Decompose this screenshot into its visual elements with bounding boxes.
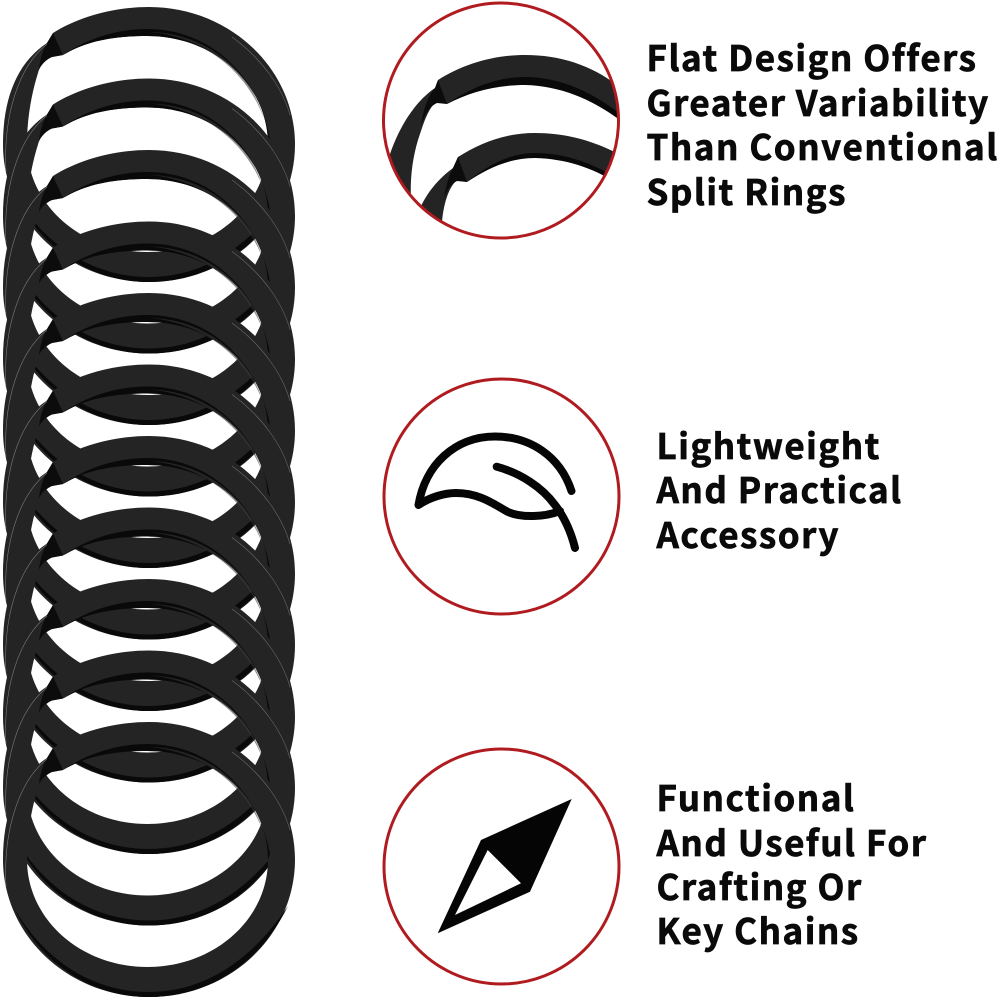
heading: flat design bbox=[646, 31, 998, 216]
callout: compass icon bbox=[384, 749, 619, 984]
ring 1 bbox=[3, 7, 295, 282]
ring 10 bbox=[3, 650, 295, 926]
heading: functional: Crafting Or bbox=[656, 860, 863, 911]
heading: functional: Functional bbox=[656, 771, 855, 822]
icon: compass needle bbox=[438, 799, 572, 933]
heading: flat design: Flat Design Offers bbox=[646, 31, 977, 82]
red circle frame bbox=[384, 749, 619, 984]
ring 7 bbox=[3, 436, 295, 711]
heading: flat design: Than Conventional bbox=[646, 120, 998, 171]
upper ring arc bbox=[390, 55, 617, 194]
heading: flat design: Split Rings bbox=[646, 165, 847, 216]
ring 8 bbox=[3, 508, 295, 782]
heading: lightweight: Accessory bbox=[656, 508, 840, 559]
close-up ring detail bbox=[385, 55, 630, 222]
ring 9 bbox=[3, 579, 295, 854]
lower ring arc bbox=[422, 133, 613, 220]
callout: leaf icon bbox=[384, 379, 619, 614]
heading: lightweight: Lightweight bbox=[656, 419, 881, 470]
stack of eleven black split rings bbox=[3, 7, 295, 997]
ring 11 bbox=[3, 722, 295, 997]
heading: functional: And Useful For bbox=[656, 816, 928, 867]
ring 2 bbox=[3, 78, 295, 354]
heading: functional bbox=[656, 771, 928, 955]
heading: lightweight: And Practical bbox=[656, 463, 903, 514]
ring 3 bbox=[3, 150, 295, 425]
red circle frame bbox=[384, 379, 619, 614]
ring 6 bbox=[3, 364, 295, 640]
ring 4 bbox=[3, 222, 295, 496]
icon: leaf bbox=[418, 436, 575, 548]
red circle frame bbox=[384, 3, 618, 238]
heading: lightweight bbox=[656, 419, 903, 559]
callout: ring close-up bbox=[384, 3, 630, 238]
heading: flat design: Greater Variability bbox=[646, 76, 990, 127]
heading: functional: Key Chains bbox=[656, 904, 860, 955]
ring 5 bbox=[3, 293, 295, 568]
